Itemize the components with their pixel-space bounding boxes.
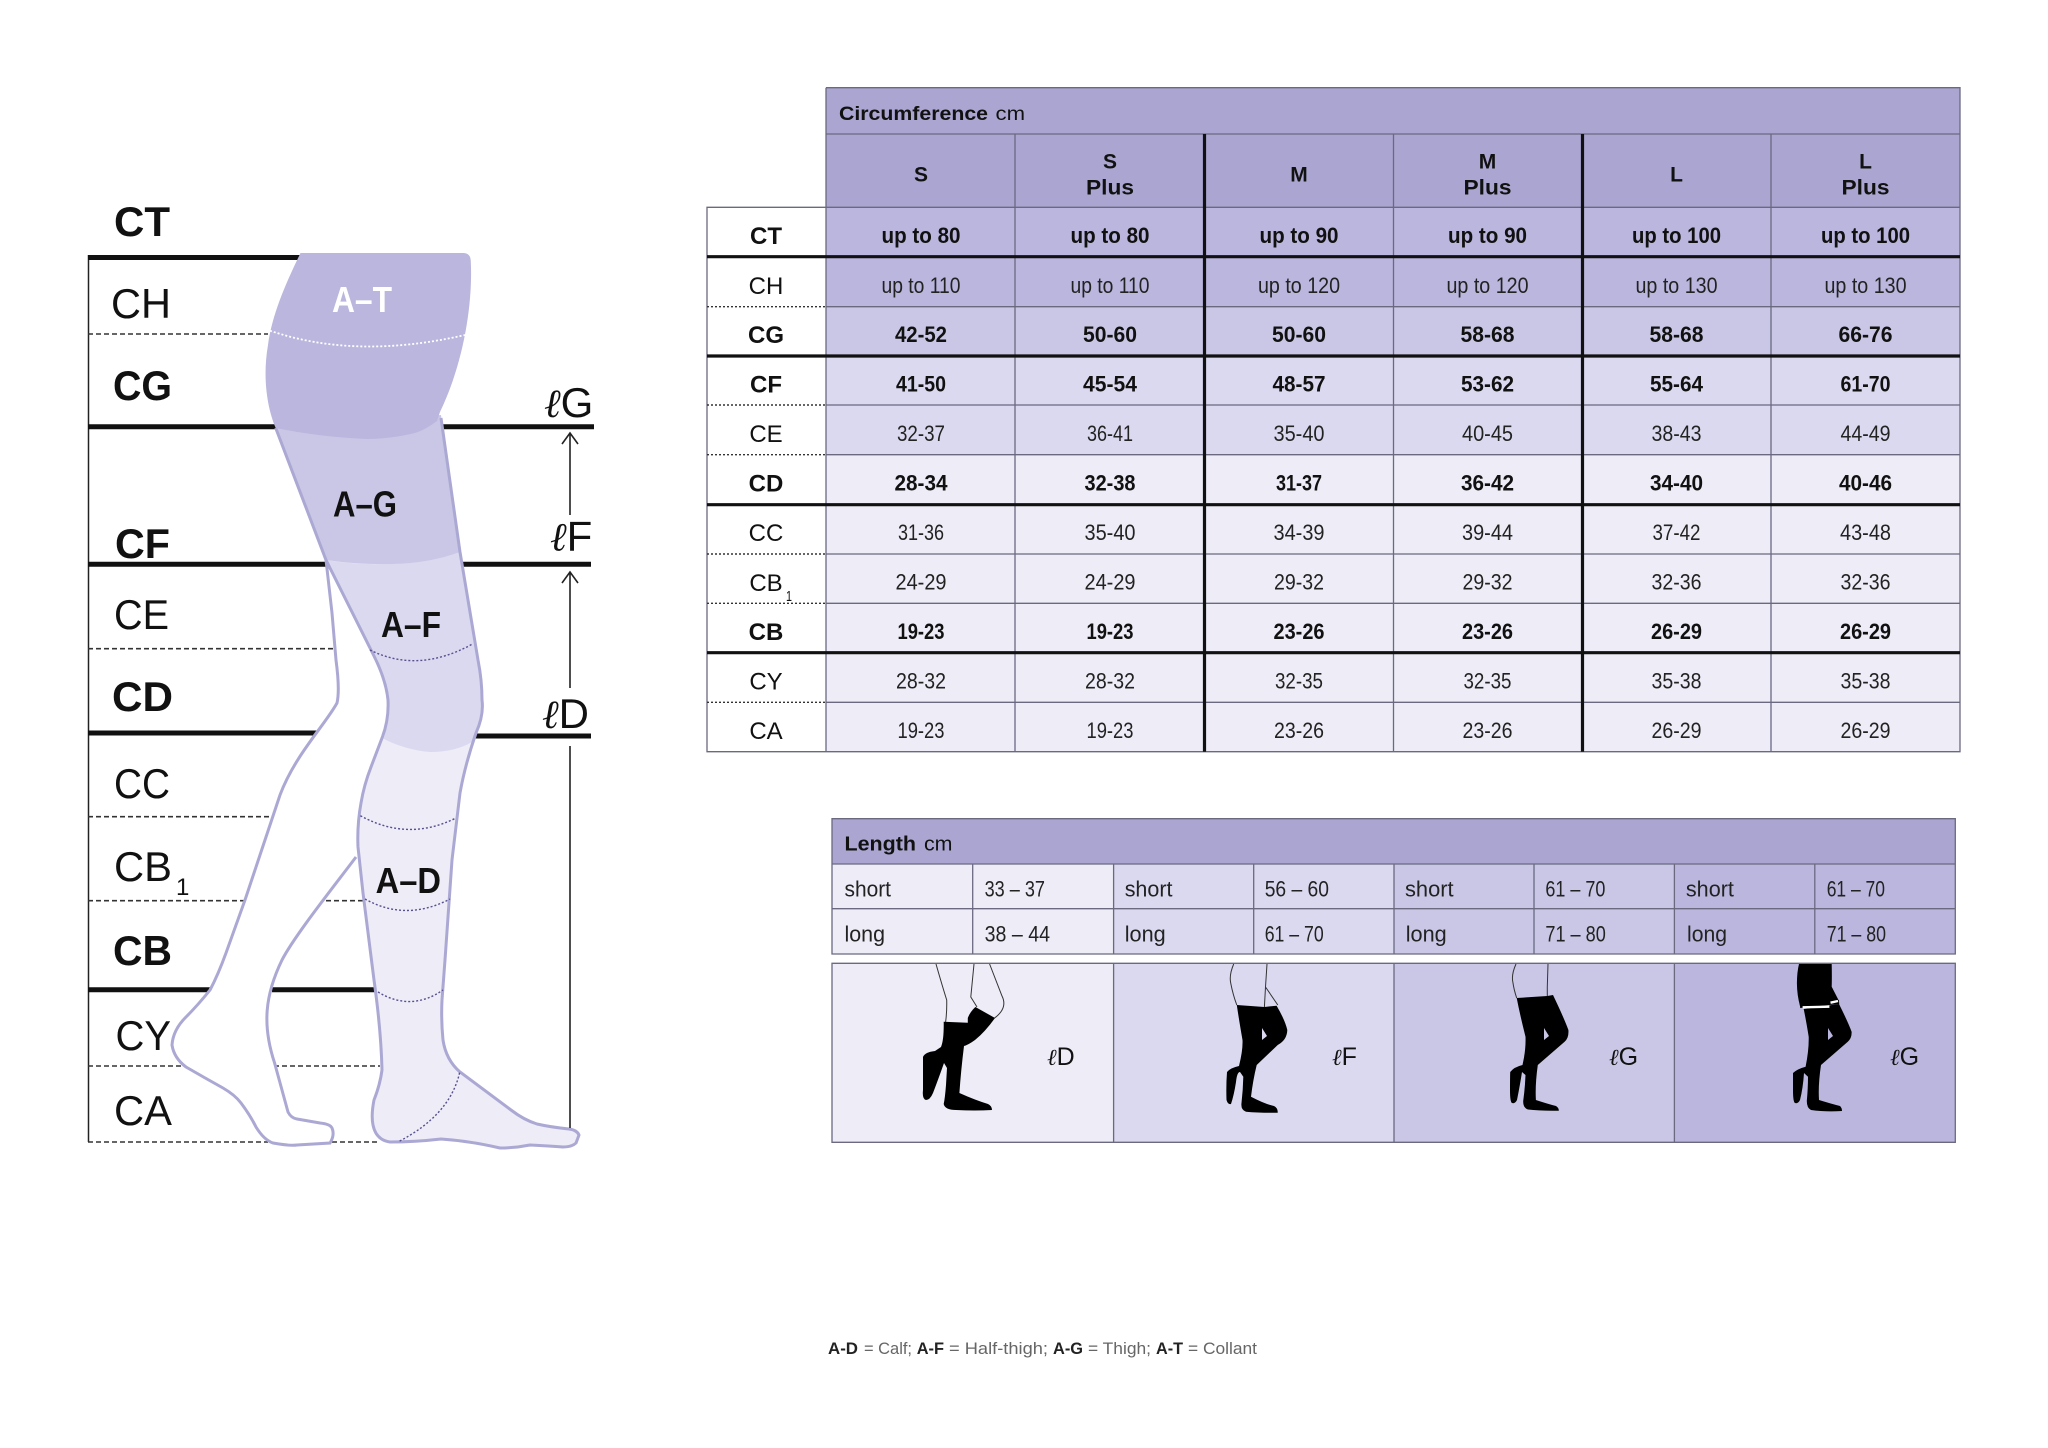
table grid: [707, 88, 1960, 752]
circumference labels: CB: [113, 927, 172, 974]
row: CE: 38-43: [1652, 421, 1702, 446]
row: CT: up to 100: [1632, 223, 1721, 248]
row: CD: [749, 470, 1892, 498]
row: CB: 26-29: [1840, 619, 1891, 644]
label: lF: ℓF: [1332, 1043, 1357, 1071]
length values: lD: 38 – 44: [985, 922, 1050, 947]
panel: length table: [832, 819, 1955, 1142]
length values: lD: long: [844, 922, 885, 947]
panel: garment pictograms: [832, 963, 1955, 1142]
length values: lG stay-up: 61 – 70: [1545, 877, 1605, 902]
front leg: A-G thigh zone: [276, 415, 460, 564]
size headers: M: [1290, 164, 1308, 187]
length values: lF: 61 – 70: [1265, 922, 1324, 947]
size headers: M: [1479, 150, 1496, 173]
row: CA: 23-26: [1462, 718, 1512, 743]
length values: lD: 33 – 37: [985, 877, 1045, 902]
row: CT: up to 90: [1260, 223, 1338, 248]
row: CG: CG: [748, 322, 784, 349]
circumference labels: CY: [116, 1012, 171, 1059]
length values: lG stay-up: [1405, 877, 1606, 947]
size headers: Plus: [1464, 176, 1512, 199]
row: CA: 26-29: [1840, 718, 1890, 743]
row: CC: CC: [749, 520, 783, 547]
row: CF: 45-54: [1083, 372, 1138, 396]
arrow: length lF: [562, 572, 578, 688]
row: CE: [749, 421, 1890, 448]
length values: lG stay-up: long: [1406, 922, 1447, 947]
circumference labels: CD: [112, 673, 173, 720]
icon: half-thigh stocking: [1226, 964, 1287, 1113]
garment zone labels: A–G: [333, 484, 397, 525]
row: CB: 26-29: [1651, 619, 1702, 644]
row: CT: [750, 223, 1910, 250]
row: CA: 23-26: [1274, 718, 1324, 743]
row: CG: [748, 322, 1892, 349]
line: length lD: [569, 746, 571, 1128]
row: CB: 19-23: [898, 619, 944, 644]
row: CB: 23-26: [1462, 619, 1513, 644]
row: CH: up to 130: [1824, 273, 1906, 298]
circumference labels: CE: [114, 591, 169, 638]
length values: lF: short: [1125, 877, 1172, 902]
circumference labels: CG: [113, 362, 172, 409]
row: CH: up to 120: [1446, 273, 1528, 298]
row: CD: 40-46: [1839, 470, 1892, 496]
length values: lF: long: [1125, 922, 1166, 947]
row: CY: [749, 668, 1890, 696]
row: CD: 28-34: [894, 470, 948, 496]
icon: thigh stocking: [1510, 964, 1568, 1111]
row: CF: 61-70: [1840, 372, 1890, 396]
footnote legend: A-T: [1156, 1339, 1184, 1358]
circumference labels: CB: [114, 843, 172, 890]
size headers: L: [1859, 150, 1872, 173]
row: CH: up to 130: [1636, 273, 1718, 298]
row: CB: CB: [749, 619, 783, 646]
row: CC: 39-44: [1462, 520, 1513, 545]
row: CT: up to 80: [1070, 223, 1150, 248]
row: CT: up to 100: [1821, 223, 1910, 248]
row: CH: CH: [749, 273, 783, 300]
size headers: Plus: [1842, 176, 1890, 199]
row: CG: 58-68: [1650, 322, 1704, 347]
length labels: [542, 379, 593, 738]
length values: lD: short: [844, 877, 891, 902]
circumference labels: CA: [114, 1087, 172, 1134]
heading: length: Length: [844, 834, 916, 856]
row: CG: 42-52: [895, 322, 947, 347]
A-T collant zone: [266, 253, 471, 439]
row: CG: 50-60: [1083, 322, 1137, 347]
row: CF: 48-57: [1272, 372, 1326, 396]
row: CE: 44-49: [1840, 421, 1890, 446]
length values: lG collant: long: [1687, 922, 1727, 947]
circumference labels: CT: [114, 198, 170, 245]
row: CE: 40-45: [1462, 421, 1513, 446]
row: CA: 19-23: [898, 718, 944, 743]
row: CY: 28-32: [896, 668, 946, 694]
footnote legend: A-D: [828, 1339, 858, 1358]
garment zone labels: A–F: [381, 604, 441, 645]
row: CD: 36-42: [1461, 470, 1514, 496]
length values: lG collant: 61 – 70: [1827, 877, 1885, 902]
front leg: A-F half-thigh zone: [326, 552, 482, 752]
row: CH: [749, 273, 1906, 300]
length values: lG stay-up: 71 – 80: [1545, 922, 1606, 947]
label: lG collant: ℓG: [1890, 1043, 1919, 1071]
footnote legend: = Half-thigh;: [949, 1339, 1048, 1358]
arrow: length lG: [562, 433, 578, 515]
row: CD: CD: [749, 470, 783, 498]
row: CY: 32-35: [1464, 668, 1512, 694]
length values: lD: [844, 877, 1050, 947]
row: CE: 36-41: [1087, 421, 1133, 446]
footnote legend: A-G: [1053, 1339, 1083, 1358]
row: CF: 55-64: [1650, 372, 1704, 396]
row: CE: CE: [749, 421, 783, 448]
row: CE: 32-37: [897, 421, 945, 446]
row: CB1: 29-32: [1462, 570, 1512, 594]
row: CF: CF: [750, 372, 782, 398]
row: CH: up to 120: [1258, 273, 1340, 298]
length labels: ℓD: [542, 690, 589, 738]
row: CC: [749, 520, 1891, 547]
row: CC: 34-39: [1274, 520, 1324, 545]
row: CG: 66-76: [1838, 322, 1892, 347]
row: CF: 41-50: [896, 372, 946, 396]
row: CA: CA: [749, 718, 783, 745]
size headers: L: [1670, 164, 1683, 187]
length labels: ℓF: [550, 513, 592, 561]
row: CA: [749, 718, 1890, 745]
row: CA: 19-23: [1086, 718, 1134, 743]
footnote legend: = Calf;: [864, 1339, 912, 1358]
row: CY: 35-38: [1840, 668, 1890, 694]
row: CT: up to 80: [882, 223, 960, 248]
row: CD: 31-37: [1276, 470, 1322, 496]
length values: lG collant: short: [1686, 877, 1734, 902]
row: CH: up to 110: [1070, 273, 1150, 298]
pictogram backgrounds: [832, 963, 1955, 1142]
length grid: [832, 819, 1955, 954]
footnote legend: = Thigh;: [1088, 1339, 1151, 1358]
panel: leg measurement diagram: [88, 198, 594, 1148]
heading: circumference: Circumference: [839, 103, 988, 125]
label: lG thigh: ℓG: [1609, 1043, 1638, 1071]
row: CB1: 24-29: [1084, 570, 1136, 594]
footnote legend: [828, 1339, 1257, 1358]
label: lD: ℓD: [1047, 1043, 1075, 1071]
row: CC: 31-36: [898, 520, 944, 545]
garment zone labels: [332, 279, 441, 901]
row: CC: 35-40: [1084, 520, 1136, 545]
row: CB1: 1: [786, 588, 792, 605]
row: CB1: 32-36: [1840, 570, 1890, 594]
icon: calf stocking: [923, 964, 1004, 1110]
length values: lF: [1125, 877, 1329, 947]
row: CY: 35-38: [1652, 668, 1702, 694]
row: CY: 32-35: [1275, 668, 1323, 694]
circumference labels: CC: [114, 760, 170, 807]
row: CA: 26-29: [1652, 718, 1702, 743]
circumference labels: 1: [176, 874, 189, 901]
row: CG: 58-68: [1460, 322, 1514, 347]
size headers: S: [914, 164, 928, 187]
measurement guide lines: [88, 255, 594, 1142]
row: CE: 35-40: [1274, 421, 1324, 446]
panel: circumference table: [707, 88, 1960, 752]
row: CD: 32-38: [1084, 470, 1136, 496]
front leg outline: [276, 418, 579, 1148]
size headers: Plus: [1086, 176, 1134, 199]
garment zone labels: A–D: [376, 860, 441, 901]
row: CF: 53-62: [1461, 372, 1514, 396]
footnote legend: = Collant: [1188, 1339, 1257, 1358]
table backgrounds: [826, 88, 1960, 752]
row: CB1: 29-32: [1274, 570, 1324, 594]
row: CY: CY: [749, 668, 783, 696]
footnote legend: A-F: [917, 1339, 944, 1358]
length values: lG collant: 71 – 80: [1827, 922, 1886, 947]
garment zone labels: A–T: [332, 279, 392, 320]
row: CB: [749, 619, 1891, 646]
row: CT: up to 90: [1448, 223, 1527, 248]
row: CH: up to 110: [882, 273, 960, 298]
length backgrounds: [832, 819, 1955, 954]
circumference labels: [111, 198, 189, 1134]
row: CG: 50-60: [1272, 322, 1326, 347]
length values: lF: 56 – 60: [1265, 877, 1329, 902]
back leg outline: [172, 560, 356, 1145]
row: CB: 23-26: [1274, 619, 1324, 644]
row: CY: 28-32: [1085, 668, 1135, 694]
row: CT: CT: [750, 223, 782, 250]
heading: length: cm: [924, 834, 952, 856]
front leg: A-D calf zone: [326, 552, 579, 1148]
row: CB: 19-23: [1086, 619, 1134, 644]
row: CB1: 24-29: [896, 570, 946, 594]
size headers: [914, 150, 1890, 199]
row: CB1: [749, 570, 1890, 605]
length labels: ℓG: [544, 379, 593, 427]
row: CB1: 32-36: [1652, 570, 1702, 594]
length values: lG stay-up: short: [1405, 877, 1454, 902]
length values: lG collant: [1686, 877, 1886, 947]
size headers: S: [1103, 150, 1117, 173]
circumference labels: CF: [115, 520, 170, 567]
row: CD: 34-40: [1650, 470, 1703, 496]
circumference labels: CH: [111, 280, 171, 327]
heading: circumference: cm: [996, 103, 1025, 125]
row: CC: 43-48: [1840, 520, 1891, 545]
row: CF: [750, 372, 1890, 398]
icon: collant: [1793, 964, 1852, 1111]
row: CB1: CB: [749, 570, 783, 597]
measurement contour dots: [270, 331, 472, 1142]
row: CC: 37-42: [1652, 520, 1700, 545]
